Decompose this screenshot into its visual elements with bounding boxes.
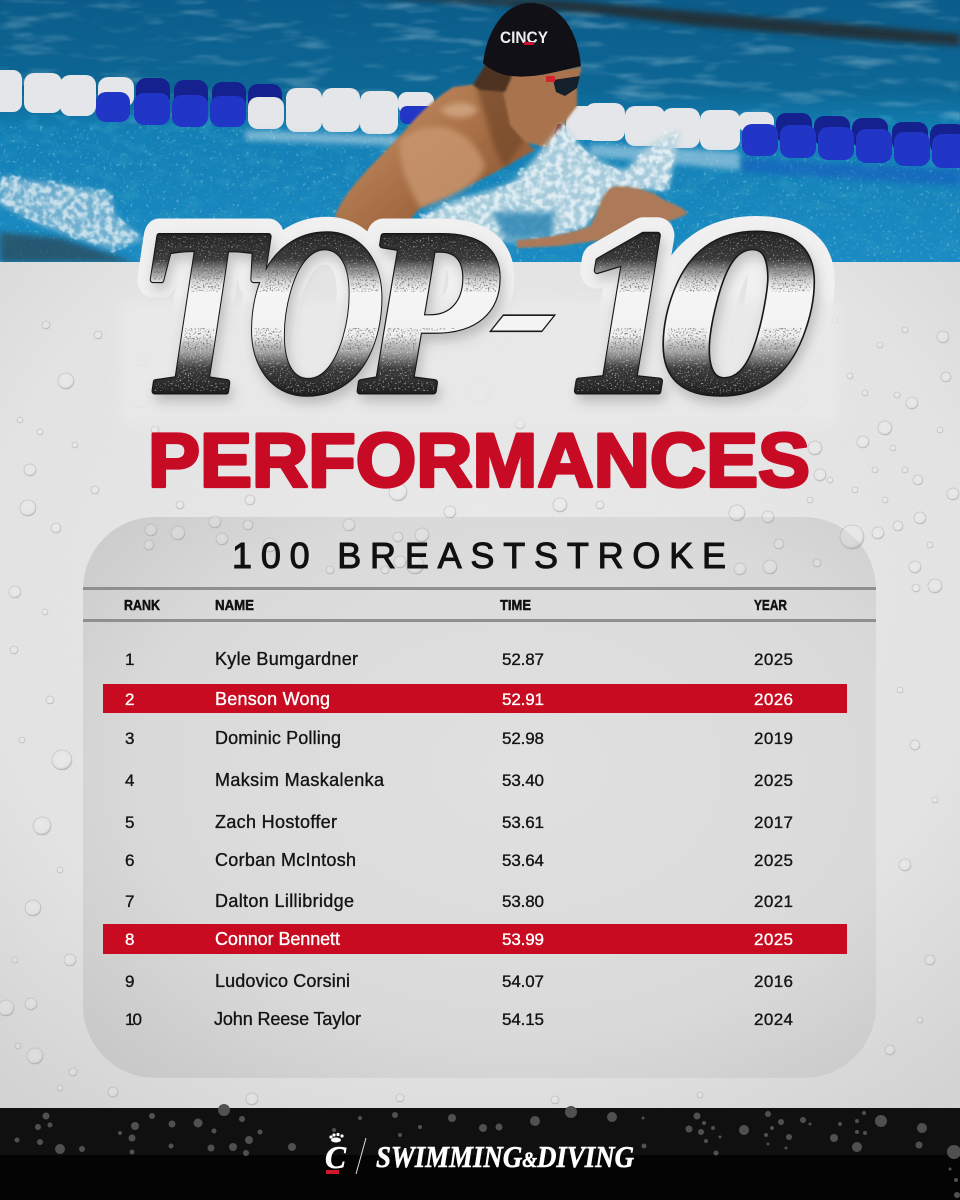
title white halo: T (138, 182, 269, 443)
footer divider slash (356, 1138, 366, 1174)
title grunge texture (130, 230, 830, 394)
row 8 highlighted (103, 924, 847, 954)
title white halo: P (359, 182, 498, 443)
row 5: 5 (125, 813, 134, 832)
hair (473, 62, 512, 92)
table header: RANK (124, 597, 160, 614)
footer band (0, 1104, 960, 1200)
row 8 highlighted: Connor Bennett (215, 929, 340, 949)
title letters: O (247, 182, 385, 443)
row 3: 2019 (754, 729, 793, 748)
row 1 (125, 649, 793, 669)
head and face (500, 67, 582, 148)
row 4: 2025 (754, 771, 793, 790)
table header: TIME (500, 597, 531, 614)
row 10: 10 (125, 1010, 142, 1029)
lane rope (0, 70, 960, 186)
background texture (0, 262, 960, 1108)
title letters (138, 182, 816, 443)
row 5 (125, 812, 793, 832)
footer label: Swimming & Diving: SWIMMING&DIVING (376, 1139, 635, 1174)
photo: swimmer in pool (0, 0, 960, 262)
row 4 (125, 770, 793, 790)
table header: YEAR (754, 597, 787, 614)
title white halo (138, 182, 816, 443)
row 10: John Reese Taylor (214, 1009, 361, 1029)
row 6: Corban McIntosh (215, 850, 356, 870)
row 5: 2017 (754, 813, 793, 832)
background panel (0, 262, 960, 1108)
row 10: 2024 (754, 1010, 793, 1029)
row 4: 4 (125, 771, 134, 790)
row 6: 2025 (754, 851, 793, 870)
foam left (0, 176, 145, 262)
row 2 highlighted (103, 684, 847, 713)
goggles (546, 76, 580, 96)
row 6 (125, 850, 793, 870)
title white halo: O (247, 182, 385, 443)
row 2 highlighted: 2026 (754, 690, 793, 709)
row 3: Dominic Polling (215, 728, 341, 748)
row 2 highlighted: 52.91 (502, 690, 544, 709)
title: TOP-10 (132, 216, 838, 430)
splash (422, 123, 680, 242)
row 7: 53.80 (502, 892, 544, 911)
row 1: Kyle Bumgardner (215, 649, 358, 669)
row 7: 2021 (754, 892, 793, 911)
table header: NAME (215, 597, 254, 614)
row 7 (125, 891, 793, 911)
subtitle: PERFORMANCES: PERFORMANCES (148, 418, 810, 504)
title letters: P (359, 182, 498, 443)
title outline layer: P (359, 182, 498, 443)
row 9 (125, 971, 793, 991)
row 7: 7 (125, 892, 134, 911)
row 5: 53.61 (502, 813, 544, 832)
row 10 (125, 1009, 793, 1029)
row 1: 1 (125, 650, 134, 669)
row 2 highlighted: Benson Wong (215, 689, 330, 709)
row 6: 53.64 (502, 851, 544, 870)
title letters: T (138, 182, 269, 443)
halo fade into background (120, 300, 840, 425)
row 5: Zach Hostoffer (215, 812, 337, 832)
title outline layer: T (138, 182, 269, 443)
title letters: 0 (656, 182, 816, 443)
row 8 highlighted: 8 (125, 930, 134, 949)
hand (517, 186, 687, 248)
row 8 highlighted: 2025 (754, 930, 793, 949)
row 6: 6 (125, 851, 134, 870)
row 8 highlighted: 53.99 (502, 930, 544, 949)
row 10: 54.15 (502, 1010, 544, 1029)
swimmer body (335, 3, 582, 245)
table header (83, 587, 876, 622)
water droplets (0, 317, 959, 1105)
row 4: Maksim Maskalenka (215, 770, 385, 790)
table panel backing (83, 517, 876, 1078)
row 3: 3 (125, 729, 134, 748)
title outline layer: O (247, 182, 385, 443)
row 2 highlighted: 2 (125, 690, 134, 709)
row 9: Ludovico Corsini (215, 971, 350, 991)
title white halo: 1 (572, 182, 682, 443)
row 1: 52.87 (502, 650, 544, 669)
title white halo: 0 (656, 182, 816, 443)
title hyphen: - (439, 199, 632, 409)
row 4: 53.40 (502, 771, 544, 790)
row 3: 52.98 (502, 729, 544, 748)
row 9: 9 (125, 972, 134, 991)
row 9: 2016 (754, 972, 793, 991)
swim cap (483, 3, 581, 77)
title outline layer (138, 182, 816, 443)
title letters: 1 (572, 182, 682, 443)
table heading: 100 BREASTSTROKE: 100 BREASTSTROKE (232, 535, 726, 576)
title outline layer: 0 (656, 182, 816, 443)
row 3 (125, 728, 793, 748)
row 7: Dalton Lillibridge (215, 891, 354, 911)
swim cap: CINCY (500, 28, 549, 47)
row 1: 2025 (754, 650, 793, 669)
footer logo: bearcat C: C (325, 1139, 347, 1175)
row 9: 54.07 (502, 972, 544, 991)
title outline layer: 1 (572, 182, 682, 443)
